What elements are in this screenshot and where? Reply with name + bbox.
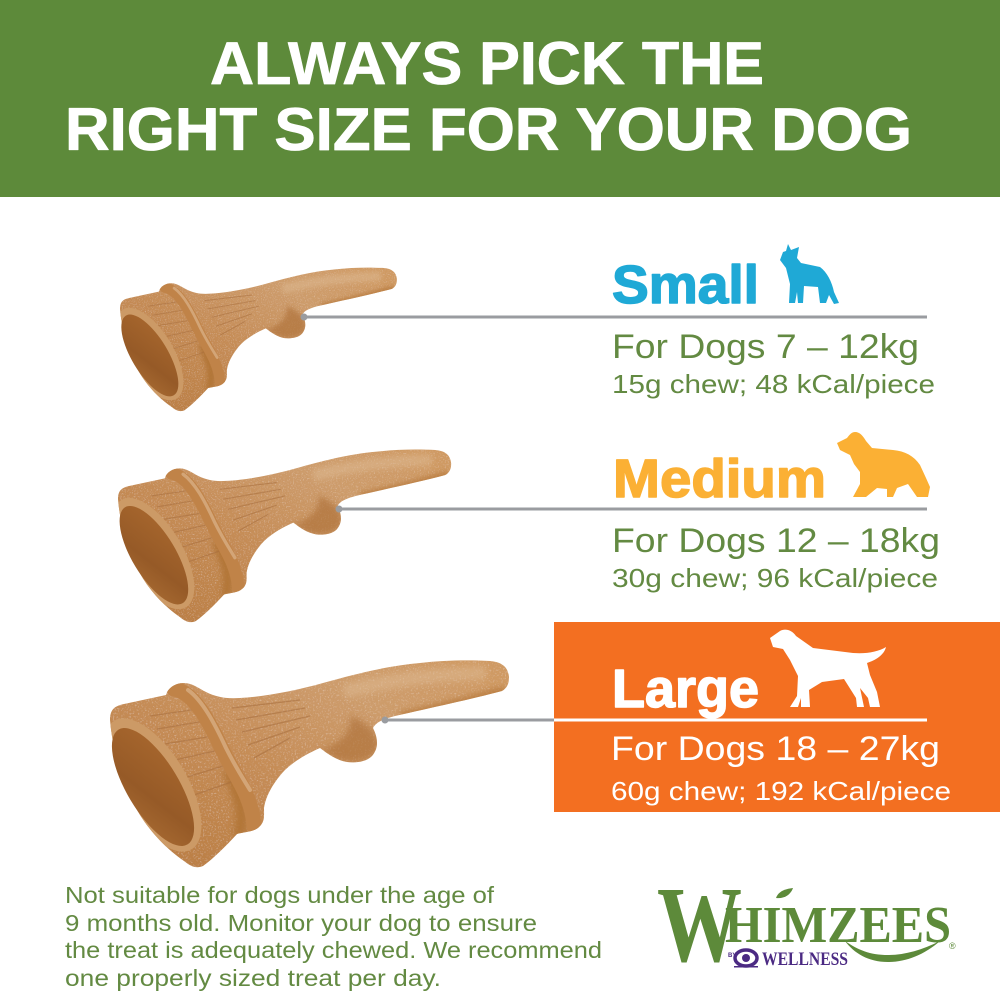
icon: leaf — [776, 888, 793, 898]
chew: small — [103, 268, 397, 411]
heading: Large: Large — [612, 659, 759, 719]
leader line: small — [300, 314, 927, 320]
heading: Medium: Medium — [613, 449, 826, 509]
footer disclaimer: the treat is adequately chewed. We recommend — [65, 937, 602, 963]
chew: medium — [97, 450, 451, 622]
footer disclaimer — [65, 882, 602, 991]
size block: medium — [336, 432, 940, 593]
swoosh — [845, 941, 940, 962]
icon: large dog — [770, 630, 886, 707]
footer disclaimer: Not suitable for dogs under the age of — [65, 882, 495, 908]
text: chew info medium: 30g chew; 96 kCal/piece — [612, 563, 938, 593]
header banner — [0, 0, 1000, 197]
logo: Whimzees by Wellness: BY — [728, 953, 736, 959]
chew: large — [85, 660, 509, 867]
icon: wellness emblem — [734, 950, 758, 968]
text: weight range medium: For Dogs 12 – 18kg — [612, 522, 940, 560]
title — [65, 30, 912, 163]
footer disclaimer: one properly sized treat per day. — [65, 965, 441, 991]
text: chew info small: 15g chew; 48 kCal/piece — [612, 369, 935, 399]
logo: Whimzees by Wellness: WELLNESS — [762, 949, 848, 970]
text: weight range large: For Dogs 18 – 27kg — [611, 730, 940, 768]
icon: medium dog — [837, 432, 930, 497]
leader line: large — [382, 716, 927, 724]
logo: Whimzees by Wellness: HIMZEES — [725, 897, 951, 954]
logo: Whimzees by Wellness: W — [657, 866, 742, 985]
footer disclaimer: 9 months old. Monitor your dog to ensure — [65, 910, 537, 936]
title: RIGHT SIZE FOR YOUR DOG — [65, 96, 912, 163]
size block: large — [382, 630, 951, 806]
logo: Whimzees by Wellness: ® — [949, 941, 956, 951]
size block: small — [300, 244, 935, 399]
text: chew info large: 60g chew; 192 kCal/piece — [611, 776, 951, 806]
panel: large background — [554, 622, 1000, 812]
text: weight range small: For Dogs 7 – 12kg — [612, 328, 919, 366]
title: ALWAYS PICK THE — [210, 30, 764, 97]
heading: Small: Small — [612, 255, 759, 315]
logo: Whimzees by Wellness — [657, 866, 956, 985]
leader line: medium — [336, 506, 927, 512]
icon: small dog — [780, 244, 839, 304]
